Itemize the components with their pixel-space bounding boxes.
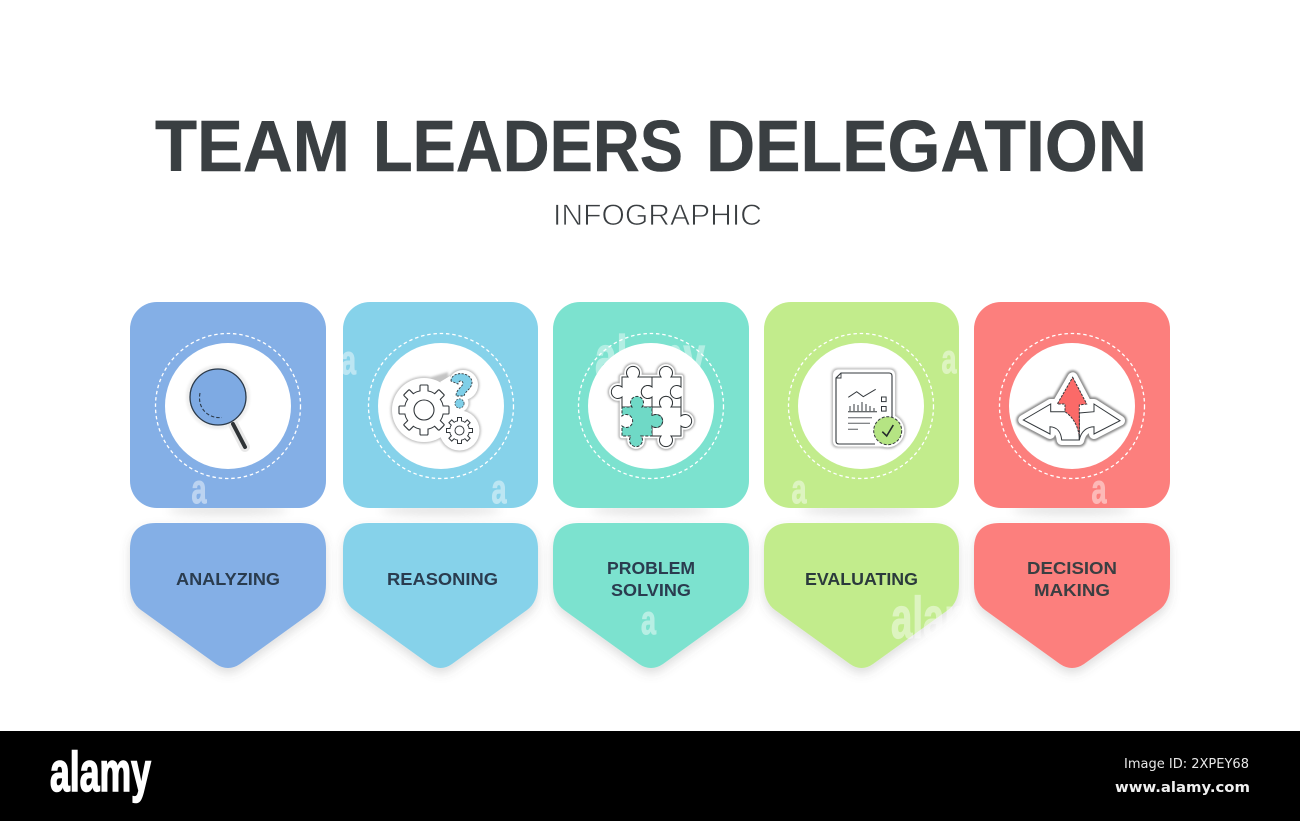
watermark letter: a xyxy=(192,466,207,512)
label shape: problem solving xyxy=(553,523,749,668)
white circle xyxy=(378,343,504,469)
watermark letter: a xyxy=(1092,466,1107,512)
label: problem solving: PROBLEM xyxy=(607,558,695,578)
watermark letter: a xyxy=(942,336,957,382)
card: reasoning xyxy=(343,302,538,508)
label: decision making: DECISION xyxy=(1027,558,1117,578)
watermark letter: a xyxy=(341,337,357,383)
dashed ring xyxy=(156,334,300,478)
white circle xyxy=(1009,343,1135,469)
label: analyzing: ANALYZING xyxy=(176,569,280,589)
icon: magnifying glass xyxy=(186,365,250,447)
footer bar xyxy=(0,731,1300,821)
card: problem solving xyxy=(553,302,749,508)
panel: analyzing xyxy=(130,302,326,514)
watermark word: alamy xyxy=(891,586,1000,651)
watermark letter: a xyxy=(492,466,507,512)
watermark word: alamy xyxy=(595,324,705,391)
label: decision making: MAKING xyxy=(1034,580,1110,600)
label shape: decision making xyxy=(974,523,1170,668)
icon: report with check mark xyxy=(832,368,906,449)
label shape: analyzing xyxy=(130,523,326,668)
panel: reasoning xyxy=(341,302,538,514)
label: problem solving: SOLVING xyxy=(611,580,691,600)
dashed ring xyxy=(578,334,724,478)
label: reasoning: REASONING xyxy=(387,569,498,589)
label shape: evaluating xyxy=(764,523,1000,668)
dashed ring xyxy=(788,334,934,478)
card: decision making xyxy=(974,302,1170,508)
subtitle: INFOGRAPHIC xyxy=(553,199,762,232)
label: evaluating: EVALUATING xyxy=(805,569,918,589)
dashed ring xyxy=(1000,334,1144,478)
white circle xyxy=(588,343,714,469)
icon: puzzle pieces xyxy=(611,366,692,447)
title: LEADERS xyxy=(373,107,683,187)
title: DELEGATION xyxy=(706,107,1147,187)
title: TEAM xyxy=(155,107,350,187)
dashed ring xyxy=(368,334,514,478)
white circle xyxy=(798,343,924,469)
watermark letter: a xyxy=(641,597,657,643)
icon: three-way arrows xyxy=(1023,377,1120,440)
card: evaluating xyxy=(764,302,959,508)
label shape: reasoning xyxy=(343,523,538,668)
website: www.alamy.com xyxy=(1115,780,1250,796)
panel: problem solving xyxy=(553,302,749,514)
icon: gears and question mark xyxy=(390,368,481,452)
watermark letter: a xyxy=(792,466,807,512)
card: analyzing xyxy=(130,302,326,508)
white circle xyxy=(165,343,291,469)
footer logo: alamy xyxy=(50,740,151,803)
panel: decision making xyxy=(974,302,1170,514)
image id: Image ID: 2XPEY68 xyxy=(1124,756,1249,772)
panel: evaluating xyxy=(764,302,959,514)
